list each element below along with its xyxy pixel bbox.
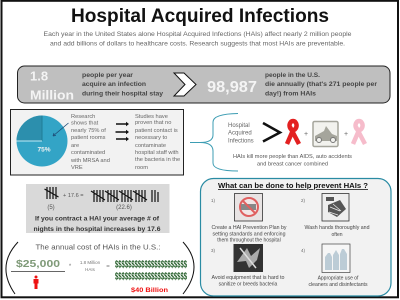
item 2 (301, 194, 370, 238)
right bracket (183, 242, 194, 294)
text: hospital acquired infections: Infections (228, 138, 254, 144)
heading: The annual cost of HAIs in the U.S.: (36, 242, 160, 252)
item 4 (301, 244, 368, 288)
text: research: patient rooms (71, 135, 106, 141)
text: research: nearly 75% of (71, 128, 106, 134)
item 4: 4) (301, 248, 306, 253)
text: studies: hospital staff with (135, 150, 179, 156)
icon: prohibition sign (234, 194, 262, 221)
icon: equipment photo (234, 244, 263, 272)
text: studies: the bacteria in the (135, 157, 180, 163)
item 2: Wash hands thoroughly and (304, 225, 370, 231)
text: research: Research (71, 114, 95, 120)
money symbols (115, 260, 187, 282)
panel: annual cost (6, 242, 194, 294)
item 4: cleaners and disinfectants (308, 282, 368, 288)
icon: auto accident (313, 122, 338, 146)
intro text: and add billions of dollars to healthcare costs. Research suggests that most HAIs are preventable. (50, 40, 345, 48)
item 2: often (331, 232, 343, 238)
heading: What can be done to help prevent HAIs ? (218, 181, 368, 190)
text: research: are (71, 143, 79, 149)
text: studies: necessary to (135, 135, 167, 141)
item 3: sanitize or breeds bacteria (219, 282, 278, 288)
left bracket (6, 242, 18, 294)
intro text: Each year in the United States alone Hospital Acquired Infections (HAIs) affect nearly 2 million people (44, 31, 352, 38)
stat: 1.8 million (30, 68, 74, 102)
text: studies: contaminate (135, 143, 166, 149)
text: research (70, 114, 110, 171)
item 3: 3) (211, 248, 216, 253)
text: people in the US: die annually (that's 271 people per (265, 81, 378, 88)
text: research: shows that (71, 120, 99, 126)
$40 billion: $40 Billion (131, 287, 168, 294)
item 1: them throughout the hospital (217, 238, 281, 244)
brace connector (190, 114, 238, 171)
panel: annual cost: HAIs (85, 267, 96, 272)
panel: stats banner (18, 66, 390, 103)
panel: tally: (5) (47, 205, 55, 211)
text: research: VRE (71, 165, 83, 171)
text: HAIs kill more: and breast cancer combined (257, 162, 328, 168)
text: people in the US (265, 72, 378, 98)
panel: annual cost: = (106, 264, 110, 270)
text: people in the US: people in the U.S. (265, 72, 320, 79)
icon: pink ribbon (353, 121, 365, 144)
plus: + (304, 131, 308, 138)
item 4: Appropriate use of (318, 276, 359, 282)
text: people per year: acquire an infection (82, 81, 146, 88)
item 1: Create a HAI Prevention Plan by (212, 225, 287, 231)
text: studies: patient contact is (135, 128, 178, 134)
tally marks: 22.6 (91, 190, 158, 202)
text: people in the US: day!) from HAIs (265, 90, 317, 98)
item 1: setting standards and enforcing (212, 232, 286, 238)
icon: red person (34, 276, 38, 289)
arrow: chevron (174, 73, 196, 96)
item 3 (211, 244, 285, 288)
text: studies: room (135, 165, 148, 171)
panel: contaminated rooms (10, 110, 184, 175)
text: HAIs kill more (233, 154, 352, 168)
tally marks: 5 (44, 187, 58, 199)
text: people per year: people per year (82, 72, 134, 79)
panel: tally: (22.6) (116, 205, 132, 211)
plus: + (344, 131, 348, 138)
pie chart: 75%: 75% (37, 146, 51, 154)
text: plus 17.6: + 17.6 = (63, 193, 84, 199)
greater than symbol (263, 123, 280, 142)
panel: tally (26, 184, 170, 233)
text: HAIs kill more: HAIs kill more people than AIDS, auto accidents (233, 154, 352, 160)
text: hospital acquired infections: Hospital (228, 123, 250, 129)
icon: washing hands (322, 194, 349, 221)
icon: red ribbon (287, 121, 299, 144)
text: hospital acquired infections (228, 123, 254, 144)
item 1 (211, 194, 287, 244)
stat: 1.8 million: 1.8 (30, 68, 48, 84)
money symbols: $$$$$$$$$$$$$$$$$$$$$$ (115, 272, 187, 282)
text: hospital acquired infections: Acquired (228, 130, 252, 136)
$25,000: $25,000 (16, 258, 60, 270)
intro text (44, 31, 352, 48)
icon: cleaner bottles (322, 244, 350, 272)
stat: 98,987: 98,987 (207, 79, 257, 96)
arrow: pointer to pie (53, 123, 68, 136)
text: studies (135, 114, 180, 171)
text: times 1.8 million: * (69, 264, 72, 270)
money symbols: $$$$$$$$$$$$$$$$$$$$$$ (115, 260, 187, 270)
item 3: Avoid equipment that is hard to (212, 275, 285, 281)
text: people per year (82, 72, 164, 98)
text: research: contaminated (71, 150, 105, 156)
panel: prevention (200, 178, 391, 296)
text: research: with MRSA and (70, 158, 110, 164)
stat: 1.8 million: Million (30, 88, 74, 102)
text: if you contract: nights in the hospital increases by 17.6 (34, 226, 161, 233)
title: Hospital Acquired Infections (71, 6, 329, 27)
arrows: three black arrows (116, 122, 129, 141)
text: if you contract: If you contract a HAI your average # of (35, 216, 160, 222)
text: if you contract (34, 216, 161, 233)
text: people per year: during their hospital stay (82, 90, 164, 98)
text: studies: proven that no (135, 120, 171, 126)
pie chart: 75% (16, 116, 68, 166)
text: studies: Studies have (135, 114, 168, 120)
panel: annual cost: 1.8 Million (80, 260, 101, 265)
item 1: 1) (211, 198, 216, 203)
item 2: 2) (301, 198, 306, 203)
